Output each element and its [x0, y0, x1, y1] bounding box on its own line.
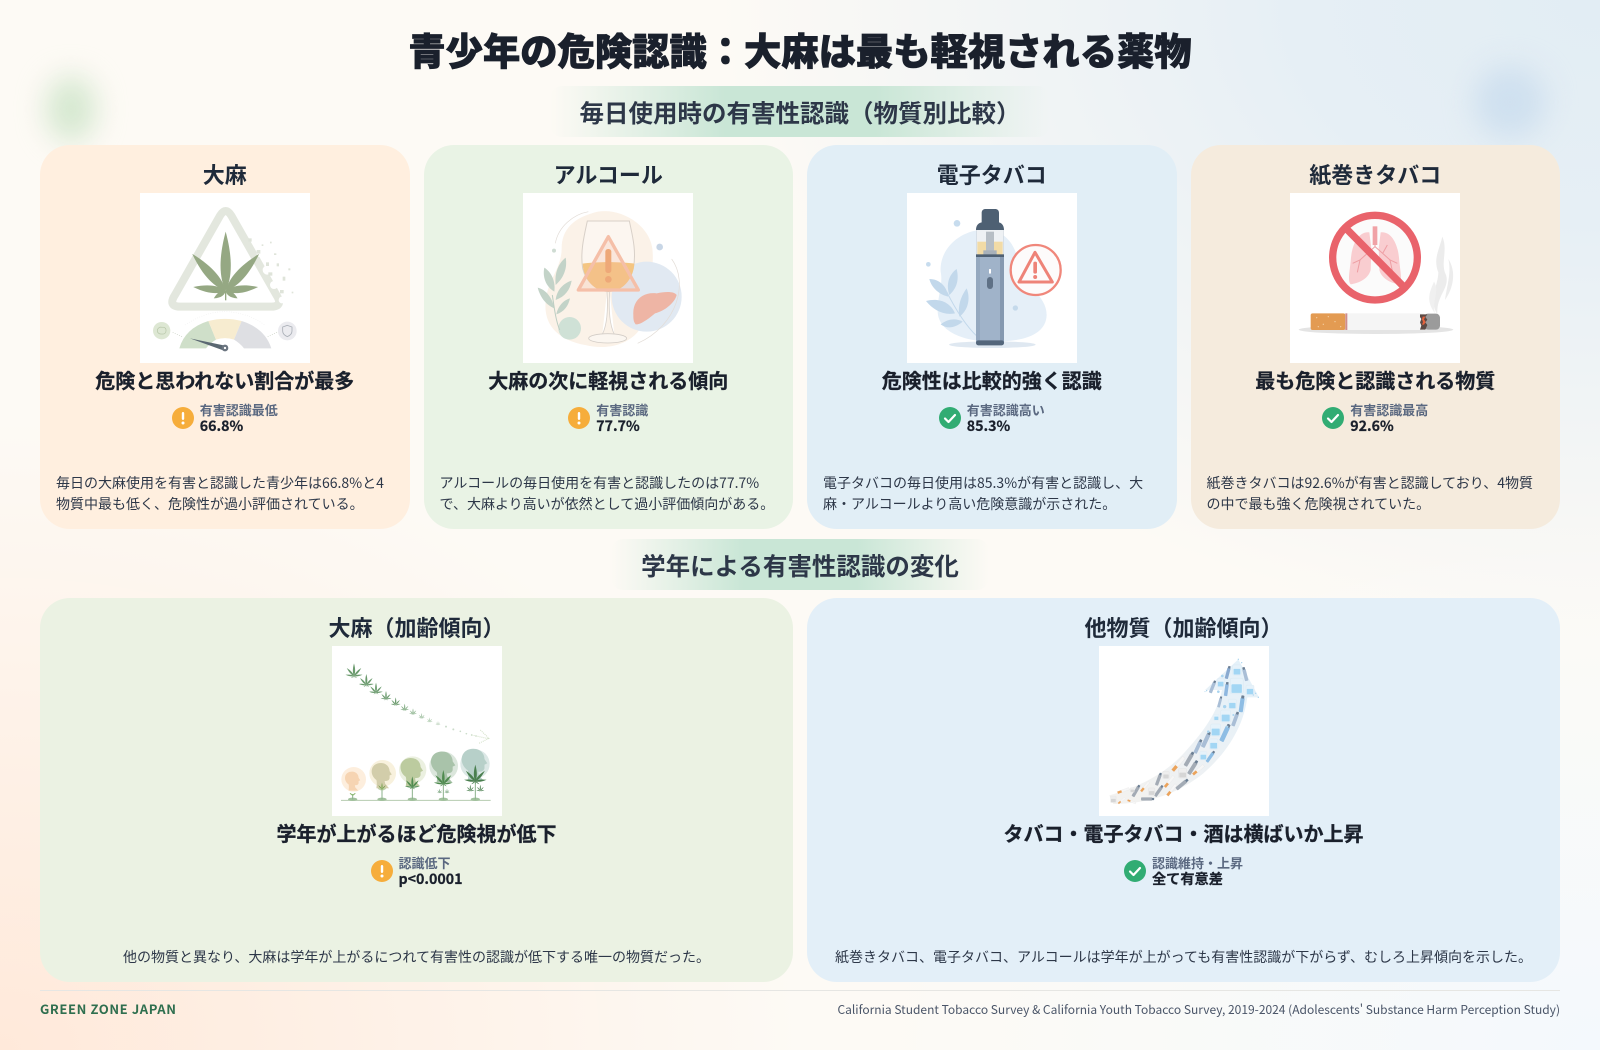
badge text	[596, 400, 648, 436]
icon: falling cannabis leaves and growing plants	[332, 646, 502, 816]
badge: maintained or rising	[1124, 853, 1243, 889]
subheading: 危険と思われない割合が最多	[95, 365, 354, 394]
panel title: 他物質（加齢傾向）	[1084, 611, 1282, 643]
badge text: 有害認識最高	[1350, 400, 1428, 419]
decorative blue glow	[1474, 66, 1546, 138]
badge: high harm perception	[939, 400, 1045, 436]
badge: lowest harm perception	[172, 400, 278, 436]
icon: check	[1322, 407, 1344, 429]
icon: upward arrow made of substance items	[1098, 646, 1268, 816]
badge text	[1350, 400, 1428, 436]
badge text: 認識低下	[398, 853, 451, 872]
badge text: p<0.0001	[398, 869, 462, 889]
icon: warning	[371, 860, 393, 882]
subheading: 学年が上がるほど危険視が低下	[276, 818, 556, 847]
icon: check	[1124, 860, 1146, 882]
badge text: 全て有意差	[1152, 869, 1223, 889]
badge: highest harm perception	[1322, 400, 1428, 436]
badge text: 77.7%	[596, 416, 640, 436]
section heading: grade change	[611, 539, 989, 590]
panel: cigarettes	[1190, 145, 1560, 529]
section heading: grade change: 学年による有害性認識の変化	[641, 548, 959, 583]
description: 紙巻きタバコは92.6%が有害と認識しており、4物質の中で最も強く危険視されていた。	[1206, 473, 1533, 514]
icon: warning	[568, 407, 590, 429]
badge text	[967, 400, 1045, 436]
badge text: 有害認識高い	[967, 400, 1045, 419]
badge text: 85.3%	[967, 416, 1010, 436]
description: 紙巻きタバコ、電子タバコ、アルコールは学年が上がっても有害性認識が下がらず、むしろ上昇傾向を示した。	[835, 947, 1532, 967]
subheading: 危険性は比較的強く認識	[882, 365, 1102, 394]
panel: e-cigarette	[807, 145, 1176, 529]
badge text	[1152, 853, 1243, 889]
panel: cannabis by grade	[40, 598, 793, 982]
icon: check	[939, 407, 961, 429]
panel title: alcohol: アルコール	[554, 158, 663, 190]
subheading: 大麻の次に軽視される傾向	[488, 365, 728, 394]
footer: brand: GREEN ZONE JAPAN	[40, 999, 177, 1018]
badge: harm perception	[568, 400, 648, 436]
section heading: substance comparison	[550, 86, 1050, 137]
panel title: e-cigarette: 電子タバコ	[937, 158, 1047, 190]
badge text: 66.8%	[200, 416, 243, 436]
panel: cannabis	[40, 145, 410, 529]
description: 電子タバコの毎日使用は85.3%が有害と認識し、大麻・アルコールより高い危険意識が示された。	[823, 473, 1143, 514]
icon: cannabis leaf in fading warning triangle with gauge	[140, 193, 310, 363]
description: アルコールの毎日使用を有害と認識したのは77.7%で、大麻より高いが依然として過小評価傾向がある。	[440, 473, 774, 514]
badge text	[200, 400, 278, 436]
badge text: 有害認識	[596, 400, 648, 419]
subheading: タバコ・電子タバコ・酒は横ばいか上昇	[1004, 818, 1364, 847]
icon: cigarette with no-symbol over lungs	[1290, 193, 1460, 363]
badge text: 92.6%	[1350, 416, 1394, 436]
badge: perception decline	[371, 853, 462, 889]
panel: other substances by grade	[807, 598, 1560, 982]
icon: vape pen with warning	[907, 193, 1077, 363]
panel title: 大麻（加齢傾向）	[328, 611, 504, 643]
panel: alcohol	[424, 145, 793, 529]
icon: warning	[172, 407, 194, 429]
badge text: 有害認識最低	[200, 400, 278, 419]
footer: source: California Student Tobacco Survey & California Youth Tobacco Survey, 2019-2024 (Adolescents' Substance Harm Perception Study)	[837, 1001, 1560, 1018]
title: 青少年の危険認識：大麻は最も軽視される薬物	[408, 22, 1192, 76]
description: 他の物質と異なり、大麻は学年が上がるにつれて有害性の認識が低下する唯一の物質だった。	[123, 947, 710, 967]
panel title: cigarettes: 紙巻きタバコ	[1309, 158, 1441, 190]
badge text	[398, 853, 462, 889]
description: 毎日の大麻使用を有害と認識した青少年は66.8%と4物質中最も低く、危険性が過小評価されている。	[56, 473, 384, 514]
decorative green glow	[46, 76, 96, 142]
icon: wine glass with warning and liver	[523, 193, 693, 363]
panel title: cannabis: 大麻	[203, 158, 247, 190]
subheading: 最も危険と認識される物質	[1255, 365, 1495, 394]
section heading: substance comparison: 毎日使用時の有害性認識（物質別比較）	[580, 95, 1020, 130]
badge text: 認識維持・上昇	[1152, 853, 1243, 872]
